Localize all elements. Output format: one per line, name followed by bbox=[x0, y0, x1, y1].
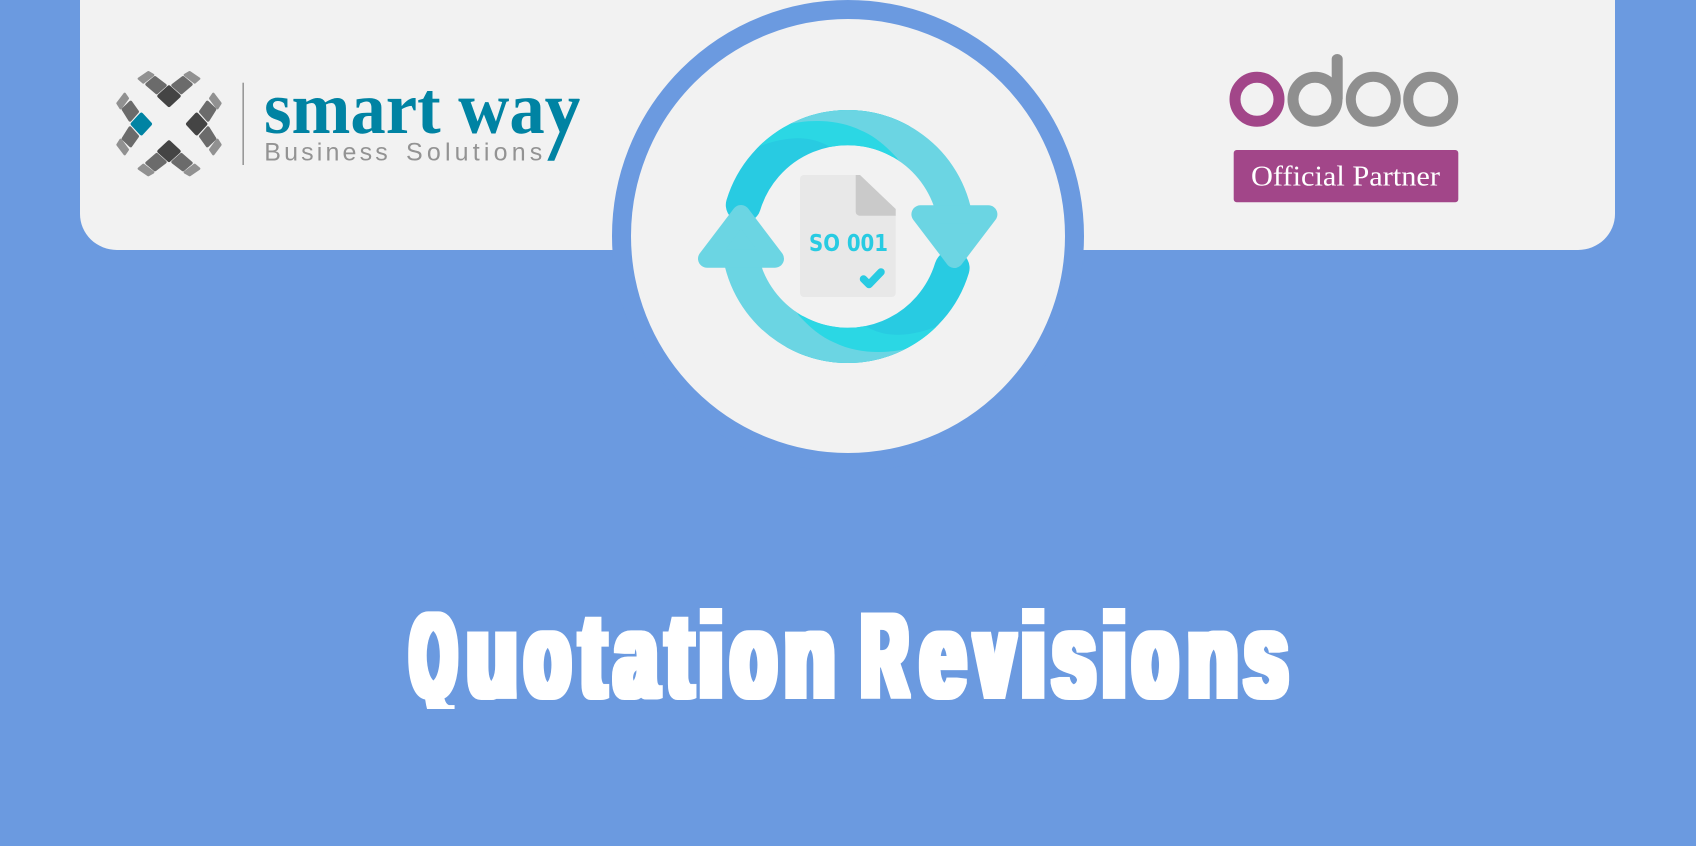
arrow: top arc bbox=[726, 110, 970, 218]
badge: official partner: Official Partner bbox=[1251, 161, 1440, 193]
title: n bbox=[785, 589, 835, 723]
title: o bbox=[525, 589, 570, 723]
tagline: Business Solutions: Solutions bbox=[406, 139, 542, 167]
logo divider bbox=[242, 83, 244, 165]
title: t bbox=[581, 589, 605, 723]
central circle badge bbox=[622, 10, 1074, 462]
logo: smart way bbox=[118, 68, 580, 175]
title: Q bbox=[411, 589, 456, 723]
title bbox=[408, 608, 1290, 709]
wordmark: odoo bbox=[1235, 54, 1453, 122]
header panel bbox=[80, 0, 1615, 250]
arrowhead: right bbox=[920, 214, 988, 259]
document label: SO 001 bbox=[809, 231, 888, 257]
title: e bbox=[921, 589, 965, 723]
arrow: bottom arc bbox=[725, 255, 970, 363]
badge: official partner bbox=[1234, 150, 1458, 202]
title: s bbox=[1245, 589, 1287, 723]
icon: check mark bbox=[864, 272, 881, 284]
title: v bbox=[976, 589, 1014, 723]
arrowhead: left bbox=[707, 214, 775, 259]
title: a bbox=[615, 589, 658, 723]
logo: odoo official partner bbox=[1234, 54, 1458, 202]
title: R bbox=[862, 589, 908, 723]
title: o bbox=[1133, 589, 1177, 723]
wordmark: smart way: smart way bbox=[264, 68, 580, 150]
icon: revision cycle arrows bbox=[707, 90, 988, 383]
title: u bbox=[467, 589, 517, 723]
title: s bbox=[1053, 589, 1095, 723]
title: i bbox=[1021, 589, 1046, 723]
tagline: Business Solutions: Business bbox=[264, 139, 388, 167]
icon: document bbox=[800, 175, 896, 297]
wordmark: smart way bbox=[266, 91, 580, 161]
title: n bbox=[1188, 589, 1238, 723]
title: i bbox=[1102, 589, 1127, 723]
icon: smart way diamond mark bbox=[118, 72, 220, 175]
title: o bbox=[731, 589, 776, 723]
title: t bbox=[667, 589, 692, 723]
title: i bbox=[698, 589, 724, 723]
